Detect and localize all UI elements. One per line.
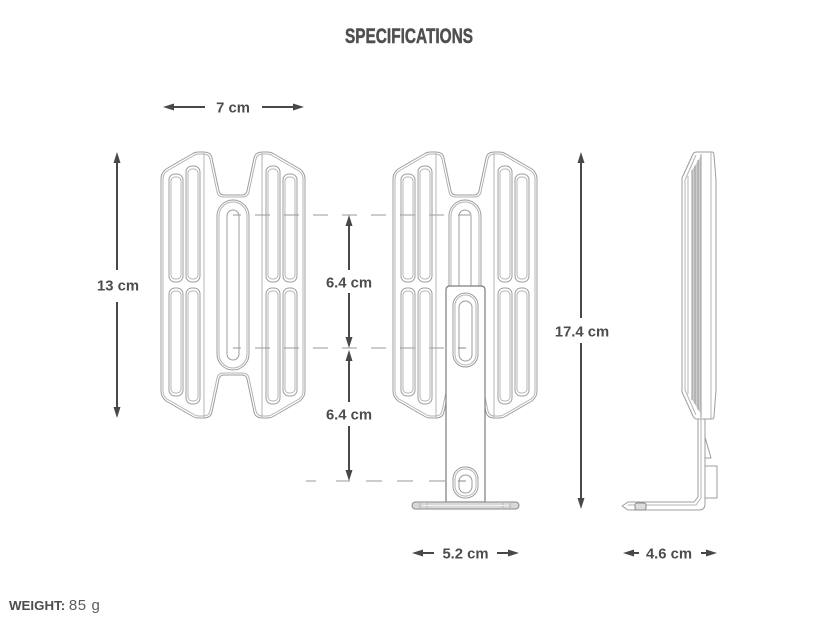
mount foot [412, 502, 519, 509]
mounting plate [446, 286, 485, 502]
dimension: 5.2 cm: 5.2 cm [442, 546, 489, 562]
dimension: 4.6 cm [623, 546, 717, 562]
rear view with mount [393, 152, 537, 509]
dimension: 4.6 cm: 4.6 cm [646, 546, 692, 562]
side panel body [682, 152, 716, 419]
dimension: 17.4 cm: 17.4 cm [555, 324, 609, 340]
dimension: 5.2 cm [412, 546, 519, 562]
side view [622, 152, 717, 510]
title: SPECIFICATIONS [345, 25, 473, 48]
height dimension: 13 cm [97, 152, 139, 418]
dimension: upper 6.4 cm: 6.4 cm [326, 276, 372, 292]
width dimension: 7 cm [163, 100, 304, 116]
dimension: lower 6.4 cm: 6.4 cm [326, 408, 372, 424]
side bracket [622, 419, 717, 510]
dimension: upper 6.4 cm [326, 215, 372, 348]
width dimension: 7 cm: 7 cm [216, 100, 250, 116]
dashed alignment lines [233, 215, 470, 481]
weight label: WEIGHT: 85 g [9, 597, 100, 614]
height dimension: 13 cm: 13 cm [97, 278, 139, 294]
front view panel [161, 152, 305, 418]
dimension: lower 6.4 cm [326, 350, 372, 481]
dimension: 17.4 cm [555, 152, 609, 509]
